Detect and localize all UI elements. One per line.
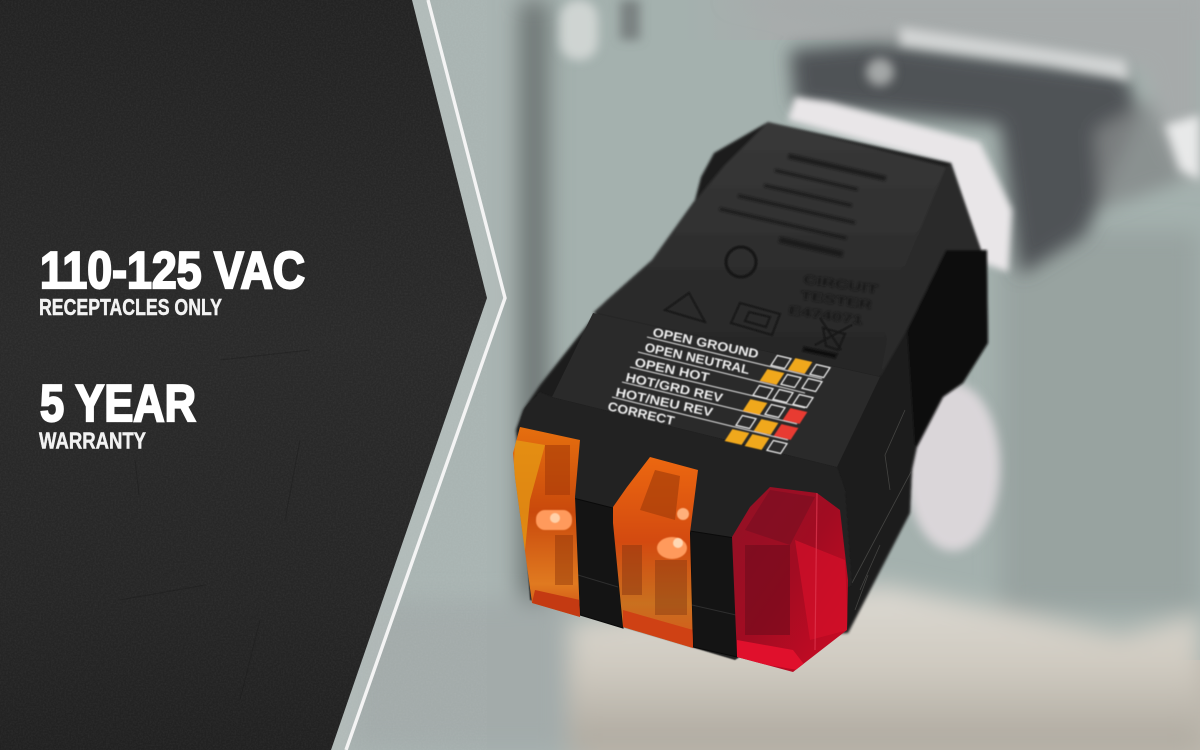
legend text: HOT/NEU REV: [614, 385, 715, 420]
spec: warranty heading: 5 YEAR: [40, 375, 196, 433]
side crack lines: [852, 410, 912, 610]
legend dividers: [612, 337, 822, 440]
icon: UL mark: [726, 247, 756, 277]
molded text on back of device: TESTER: [800, 288, 873, 312]
lens: middle orange: [613, 457, 698, 648]
legend text: OPEN GROUND: [651, 325, 760, 361]
panel: light chevron band: [0, 0, 505, 750]
outlet tester device: [505, 122, 988, 675]
device body: [516, 122, 988, 640]
panel: dark chevron: [0, 0, 487, 750]
molded text on back of device: E474071: [788, 303, 864, 327]
legend text: CORRECT: [606, 399, 676, 428]
legend indicator squares: [726, 356, 830, 453]
chart: status legend rows: [606, 325, 830, 453]
legend text: OPEN NEUTRAL: [643, 340, 751, 377]
front face: [518, 392, 852, 660]
legend text: [606, 325, 760, 428]
icon: warning triangle: [665, 293, 705, 322]
lens: right red: [732, 487, 848, 672]
icon: double insulation square: [731, 303, 780, 335]
sticker panel: [552, 313, 880, 467]
legend text: OPEN HOT: [633, 355, 711, 385]
icon: crossed-out bin: [803, 318, 852, 358]
molded text on back of device: [715, 141, 886, 327]
black bands between lenses: [573, 498, 737, 657]
lens: left orange: [513, 427, 580, 617]
spec: warranty caption: WARRANTY: [39, 428, 146, 454]
molded text on back of device: CIRCUIT: [803, 272, 880, 297]
white chevron line: [346, 0, 505, 750]
spec: voltage heading: 110-125 VAC: [40, 242, 305, 300]
legend text: HOT/GRD REV: [624, 370, 725, 406]
spec: voltage caption: RECEPTACLES ONLY: [39, 294, 222, 320]
